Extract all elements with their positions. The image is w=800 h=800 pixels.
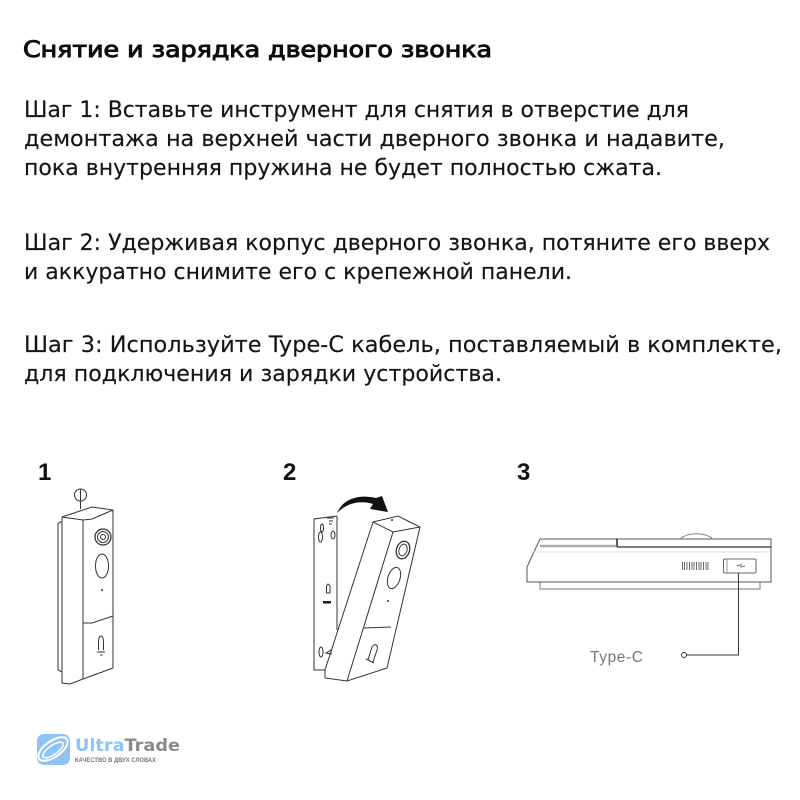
device side body — [527, 534, 771, 589]
sensor dot — [101, 589, 103, 591]
text block: step 1: пока внутренняя пружина не будет полностью сжата. — [24, 156, 662, 181]
text block: step 3 — [24, 333, 782, 387]
speaker grille — [682, 562, 708, 570]
logo tagline: КАЧЕСТВО В ДВУХ СЛОВАХ — [75, 757, 157, 764]
illustration: doorbell with removal tool — [58, 489, 113, 684]
top hole — [391, 519, 393, 521]
illustration: doorbell side view with Type-C port — [527, 534, 771, 666]
doorbell body — [58, 507, 113, 684]
sensor dot — [387, 600, 389, 602]
mount slot — [323, 601, 331, 604]
doorbell camera and sensor — [95, 529, 111, 578]
step number 3: 3 — [517, 459, 530, 486]
leader end circle — [682, 652, 686, 658]
label: Type-C: Type-C — [590, 649, 643, 666]
logo: UltraTrade — [34, 733, 180, 765]
step number 1: 1 — [38, 459, 51, 486]
leader line — [686, 573, 738, 655]
text block: step 2 — [24, 231, 770, 285]
logo icon — [34, 733, 72, 765]
text block: step 1 — [24, 98, 725, 181]
title: Снятие и зарядка дверного звонка — [23, 38, 492, 63]
step number 2: 2 — [283, 459, 296, 486]
arrow: lift direction — [337, 496, 388, 513]
text block: step 2: и аккуратно снимите его с крепежной панели. — [24, 260, 572, 285]
doorbell body tilted — [325, 516, 420, 681]
text block: step 2: Шаг 2: Удерживая корпус дверного звонка, потяните его вверх — [24, 231, 770, 256]
mounting plate — [314, 516, 337, 670]
Type-C port — [724, 559, 756, 573]
text block: step 3: Шаг 3: Используйте Type-C кабель, поставляемый в комплекте, — [24, 333, 782, 358]
text block: step 1: Шаг 1: Вставьте инструмент для снятия в отверстие для — [24, 98, 689, 123]
icon: bell — [97, 636, 105, 655]
camera and sensor — [385, 539, 412, 590]
illustration: doorbell lifted from mount — [314, 496, 420, 681]
text block: step 1: демонтажа на верхней части дверного звонка и надавите, — [24, 127, 725, 152]
text block: step 3: для подключения и зарядки устройства. — [24, 362, 502, 387]
icon: removal tool — [74, 489, 86, 509]
icon: bell tilted — [366, 645, 378, 663]
logo wordmark: UltraTrade — [75, 736, 180, 756]
